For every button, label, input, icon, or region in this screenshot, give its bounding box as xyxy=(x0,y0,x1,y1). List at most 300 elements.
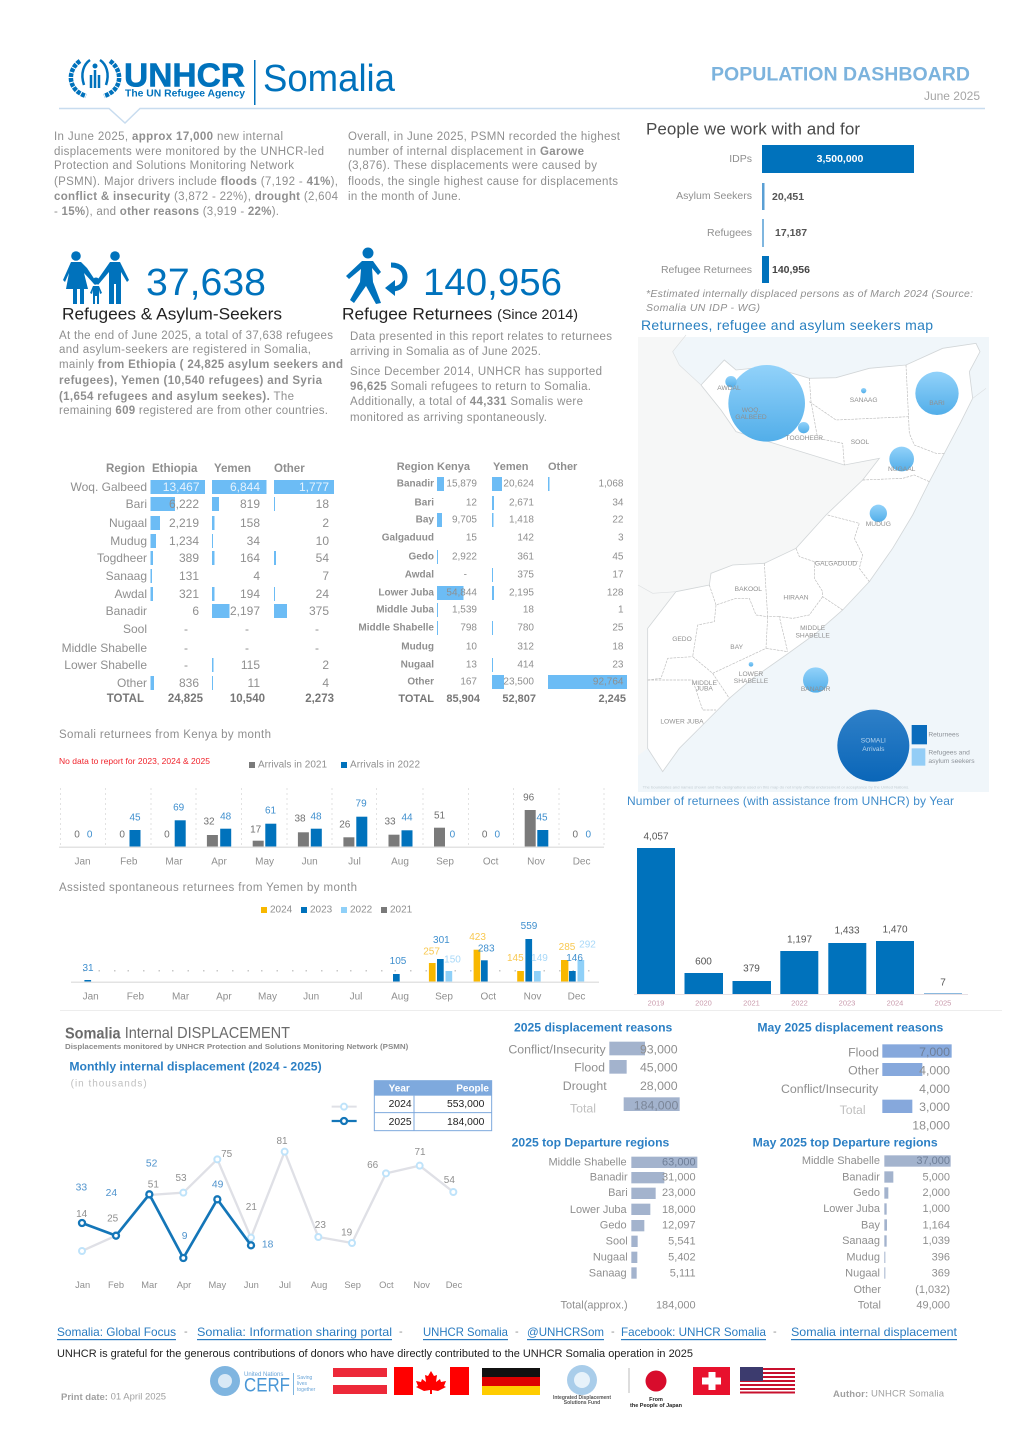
labels 2024: 51 xyxy=(148,1179,159,1190)
table: May 2025 displacement reasons: 4,000 xyxy=(919,1063,950,1077)
table: May 2025 top departure regions: 1,000 xyxy=(922,1203,950,1215)
labels 2024: 54 xyxy=(444,1175,455,1186)
footer links: - xyxy=(515,1326,519,1338)
summary table: 2024 xyxy=(389,1099,412,1110)
table rows: 15 xyxy=(466,532,477,544)
month labels: Oct xyxy=(481,992,496,1002)
table rows: - xyxy=(315,641,319,655)
table: May 2025 top departure regions: Nugaal xyxy=(845,1267,880,1279)
data labels: 33 xyxy=(384,816,396,828)
table rows: 2,219 xyxy=(169,516,199,530)
table rows: Middle Shabelle xyxy=(358,622,434,634)
bubble: Togdheer xyxy=(798,422,809,433)
units note: (in thousands) xyxy=(71,1078,147,1089)
section rule xyxy=(60,1010,1002,1011)
table header: Kenya xyxy=(437,461,471,473)
chart legend: 2024 xyxy=(270,904,293,916)
table: 2025 top departure regions: Sanaag xyxy=(589,1267,627,1279)
summary table: People xyxy=(456,1083,489,1094)
month labels: Mar xyxy=(141,1280,157,1290)
table rows: 375 xyxy=(309,604,329,618)
subheading: Refugee Returnees (Since 2014) xyxy=(342,304,578,324)
table rows: 131 xyxy=(179,569,199,583)
table rows: 9,705 xyxy=(452,514,477,526)
footer links xyxy=(57,1325,958,1339)
table rows: 1,418 xyxy=(509,514,534,526)
table rows: Banadir xyxy=(397,478,434,490)
data labels xyxy=(74,792,592,840)
table rows: 167 xyxy=(460,676,477,688)
table rows: 11 xyxy=(248,676,260,690)
line: 2024 xyxy=(79,1149,456,1254)
bar: refugee returnees: 140,956 xyxy=(772,264,810,276)
table: May 2025 top departure regions: (1,032) xyxy=(915,1284,950,1296)
region labels: SHABELLE xyxy=(795,632,830,639)
dashboard title: POPULATION DASHBOARD xyxy=(711,64,970,86)
data labels: 0 xyxy=(482,830,488,840)
footer links: Somalia: Information sharing portal xyxy=(197,1325,392,1339)
data labels: 301 xyxy=(433,935,450,946)
table: May 2025 displacement reasons: Other xyxy=(848,1063,879,1077)
table rows: 13,467 xyxy=(163,480,200,494)
data labels: 283 xyxy=(478,944,495,954)
table: 2025 top departure regions: Nugaal xyxy=(593,1252,628,1264)
table rows: 24 xyxy=(316,587,329,601)
table rows: 10 xyxy=(466,642,477,652)
body text: remaining 609 registered are from other countries. xyxy=(59,405,328,417)
section subtitle: Displacements monitored by UNHCR Protection and Solutions Monitoring Network (PSMN) xyxy=(65,1042,409,1051)
table: 2025 top departure regions: Lower Juba xyxy=(570,1204,628,1216)
donor logos xyxy=(210,1365,795,1409)
bubble: Awdal xyxy=(725,376,737,387)
logo divider xyxy=(254,60,256,105)
table rows: 1,234 xyxy=(169,534,199,548)
table rows: 15,879 xyxy=(446,478,477,490)
intro text right: in the month of June. xyxy=(348,191,461,203)
region labels: SOOL xyxy=(851,439,870,446)
data labels: 26 xyxy=(339,820,351,830)
chart legend xyxy=(249,760,420,770)
region borders xyxy=(648,365,944,710)
table rows: 23 xyxy=(612,660,624,670)
data labels: 600 xyxy=(695,956,712,968)
month labels: Mar xyxy=(172,992,190,1002)
region labels: TOGDHEER xyxy=(786,435,823,442)
month labels: Jun xyxy=(302,856,318,868)
labels 2024: 14 xyxy=(76,1209,88,1220)
big number: 140,956 xyxy=(423,262,562,304)
table header xyxy=(397,461,578,473)
author: Author: UNHCR Somalia xyxy=(833,1388,945,1400)
footer links: Somalia internal displacement xyxy=(791,1325,958,1339)
icon: walker with return arrow xyxy=(346,248,405,304)
labels 2024: 81 xyxy=(276,1136,288,1147)
month labels: Oct xyxy=(483,856,499,868)
table rows: 18 xyxy=(316,497,329,511)
data labels: 0 xyxy=(586,830,592,840)
region labels: AWDAL xyxy=(717,385,741,392)
table rows: 1 xyxy=(618,604,624,616)
month labels: Oct xyxy=(379,1280,394,1290)
chart legend: 2022 xyxy=(350,904,373,916)
table rows: Nugaal xyxy=(401,660,434,670)
table bars xyxy=(437,477,627,689)
month labels: May xyxy=(209,1280,226,1290)
footer links: UNHCR Somalia xyxy=(423,1325,508,1339)
intro text right: floods, the single highest cause for displacements xyxy=(348,176,618,188)
body text: Data presented in this report relates to returnees xyxy=(350,331,612,343)
data labels: 45 xyxy=(536,812,548,824)
body text: refugees), Yemen (10,540 refugees) and Syria xyxy=(59,375,323,387)
month labels: Aug xyxy=(391,856,409,868)
month labels: Aug xyxy=(391,992,409,1002)
region labels: Arrivals xyxy=(862,746,885,753)
table rows: - xyxy=(184,622,188,636)
table header: Yemen xyxy=(493,461,529,473)
table rows: - xyxy=(464,570,467,580)
data labels: 44 xyxy=(401,812,413,824)
table rows: Nugaal xyxy=(109,516,147,530)
bubble: Sanaag xyxy=(861,388,866,393)
table: May 2025 displacement reasons xyxy=(757,1020,952,1132)
table rows: 414 xyxy=(517,660,534,670)
labels 2024: 25 xyxy=(107,1213,119,1224)
logo: CERF: lives xyxy=(297,1381,308,1387)
table: May 2025 top departure regions: 37,000 xyxy=(916,1155,950,1167)
labels 2024: 66 xyxy=(367,1160,379,1171)
chart: returnees from Yemen by month xyxy=(59,882,599,1002)
table rows: 1,777 xyxy=(299,480,329,494)
labels 2025: 9 xyxy=(182,1231,188,1242)
labels 2025 xyxy=(76,1158,274,1250)
data labels: 423 xyxy=(469,932,486,943)
body text xyxy=(350,331,612,424)
intro text left: (PSMN). Major drivers include floods (7,192 - 41%), xyxy=(54,176,338,188)
legend: asylum seekers xyxy=(928,758,975,765)
data labels: 0 xyxy=(573,830,579,840)
table: May 2025 top departure regions: Other xyxy=(854,1284,881,1296)
table: May 2025 displacement reasons: Total xyxy=(840,1103,866,1117)
labels 2024 xyxy=(76,1136,455,1238)
table rows: 4 xyxy=(253,569,260,583)
month labels: Nov xyxy=(527,856,545,868)
table: May 2025 top departure regions: Banadir xyxy=(842,1171,880,1183)
bar: IDPs: IDPs xyxy=(729,153,752,165)
bubble: Woqooyi Galbeed xyxy=(728,365,805,442)
header rule with notch xyxy=(59,108,985,123)
month labels xyxy=(75,1280,463,1290)
table: 2025 top departure regions: 63,000 xyxy=(662,1156,696,1168)
month labels: Feb xyxy=(120,856,138,868)
footer links: - xyxy=(399,1326,403,1338)
table rows: 34 xyxy=(247,534,260,548)
bar: refugees: Refugees xyxy=(707,227,752,239)
bar: refugee returnees xyxy=(661,256,810,283)
bar: asylum seekers: Asylum Seekers xyxy=(676,190,752,202)
table rows: 7 xyxy=(322,569,329,583)
chart title: Number of returnees (with assistance from UNHCR) by Year xyxy=(627,794,954,808)
line legend xyxy=(332,1104,357,1124)
table: 2025 top departure regions: 23,000 xyxy=(662,1187,696,1199)
table totals xyxy=(398,693,626,705)
table: returnees by region xyxy=(358,461,627,705)
table totals: 10,540 xyxy=(230,693,265,705)
table rows xyxy=(358,478,624,688)
region labels: WOQ. xyxy=(742,407,760,414)
data labels: 69 xyxy=(173,802,185,814)
table: May 2025 top departure regions: 49,000 xyxy=(916,1300,950,1312)
body text: (1,654 refugees and asylum seekes). The xyxy=(59,391,294,403)
table rows: 2,922 xyxy=(452,552,477,562)
labels 2025: 33 xyxy=(76,1182,87,1193)
donor acknowledgement: UNHCR is grateful for the generous contributions of donors who have directly contributed to the UNHCR Somalia operation in 2025 xyxy=(57,1348,693,1360)
table rows: Lower Juba xyxy=(378,588,434,598)
table: 2025 displacement reasons: Conflict/Insecurity xyxy=(508,1042,606,1056)
region labels: LOWER JUBA xyxy=(660,718,704,725)
data labels: 31 xyxy=(82,963,94,974)
footnote: Somalia UN IDP - WG) xyxy=(646,302,760,314)
table rows: 34 xyxy=(612,498,624,508)
table: 2025 top departure regions: Sool xyxy=(606,1236,628,1248)
year labels: 2020 xyxy=(695,998,712,1008)
table totals xyxy=(107,693,334,705)
labels 2024: 53 xyxy=(175,1173,187,1184)
table rows: 18 xyxy=(523,604,534,616)
logo: CERF: Saving xyxy=(297,1375,313,1381)
region labels: GALGADUUD xyxy=(815,560,857,567)
region labels: MIDDLE xyxy=(692,680,717,687)
table rows: 10 xyxy=(316,534,329,548)
logo: CERF xyxy=(210,1366,316,1396)
bar: asylum seekers: 20,451 xyxy=(772,191,804,203)
bubble: Bari xyxy=(915,372,959,415)
data labels: 48 xyxy=(220,812,232,822)
year labels: 2021 xyxy=(743,998,760,1008)
footer links: - xyxy=(773,1326,777,1338)
table header: Ethiopia xyxy=(152,463,198,475)
table rows: 128 xyxy=(607,588,624,598)
table: 2025 top departure regions: 18,000 xyxy=(662,1204,696,1216)
table: 2025 top departure regions: 12,097 xyxy=(662,1220,696,1232)
data labels: 17 xyxy=(250,824,262,836)
flag: Canada xyxy=(394,1367,469,1395)
table totals: 24,825 xyxy=(168,693,204,705)
month labels: Feb xyxy=(127,992,144,1002)
footnote xyxy=(646,288,973,314)
summary table: 2025 xyxy=(389,1117,412,1128)
month labels: Nov xyxy=(413,1280,430,1290)
logo tagline: The UN Refugee Agency xyxy=(125,88,245,100)
flag: USA xyxy=(740,1367,795,1393)
chart legend xyxy=(261,904,413,916)
labels 2025: 24 xyxy=(106,1188,117,1199)
chart: returnees from Kenya by month xyxy=(59,729,604,868)
table: 2025 top departure regions xyxy=(512,1136,697,1312)
panel: displacement tables xyxy=(508,1020,952,1312)
table: 2025 top departure regions: Banadir xyxy=(590,1172,628,1184)
line: 2025 xyxy=(79,1191,254,1261)
table: May 2025 displacement reasons: 7,000 xyxy=(919,1045,950,1059)
month labels: Jun xyxy=(303,992,319,1002)
table: 2025 top departure regions: Total(approx.) xyxy=(561,1300,628,1312)
table rows: Woq. Galbeed xyxy=(70,480,147,494)
region labels: MIDDLE xyxy=(800,625,826,632)
table rows: 25 xyxy=(612,622,624,634)
legend xyxy=(912,725,975,766)
region labels: MUDUG xyxy=(866,521,891,528)
data labels: 51 xyxy=(434,810,445,822)
table: May 2025 top departure regions xyxy=(753,1136,951,1312)
table rows: Sool xyxy=(123,622,147,636)
table rows: 17 xyxy=(612,570,624,580)
table rows: 13 xyxy=(466,660,477,670)
data labels: 257 xyxy=(423,946,440,958)
table: 2025 top departure regions: Middle Shabelle xyxy=(548,1156,627,1168)
data labels: 146 xyxy=(566,953,583,964)
month labels: Jan xyxy=(74,856,91,868)
axis xyxy=(59,846,604,848)
labels 2025: 18 xyxy=(262,1239,274,1250)
map source note: The boundaries and names shown and the designations used on this map do not imply official endorsement or acceptance by the United Nations. xyxy=(643,784,909,789)
region labels: HIRAAN xyxy=(783,594,809,601)
table rows: 1,068 xyxy=(598,478,624,490)
table rows: 142 xyxy=(517,532,534,544)
region labels: BARI xyxy=(929,400,945,407)
bars xyxy=(84,939,584,982)
table: 2025 top departure regions: 31,000 xyxy=(662,1172,696,1184)
table totals: 2,245 xyxy=(598,693,626,705)
table rows: 375 xyxy=(517,570,534,580)
table totals: TOTAL xyxy=(107,693,144,705)
table rows: Sanaag xyxy=(106,569,147,583)
section title: Somalia Internal DISPLACEMENT xyxy=(65,1025,290,1042)
table: 2025 displacement reasons: Drought xyxy=(563,1079,607,1093)
body text xyxy=(59,330,343,417)
table rows: Bay xyxy=(416,514,434,526)
footer links: - xyxy=(611,1326,615,1338)
bubble: Banadir xyxy=(803,667,828,693)
icon: UNHCR emblem xyxy=(71,60,119,96)
table rows: 158 xyxy=(240,516,260,530)
logo: CERF: United Nations xyxy=(244,1372,283,1378)
region labels: SANAAG xyxy=(850,397,878,404)
footer links: @UNHCRSom xyxy=(527,1325,604,1339)
data labels: 45 xyxy=(129,812,141,824)
month labels xyxy=(83,992,585,1002)
table rows: - xyxy=(315,622,319,636)
month labels: Jul xyxy=(350,992,362,1002)
month labels: Sep xyxy=(436,856,454,868)
table rows: 389 xyxy=(179,551,199,565)
chart legend: 2021 xyxy=(390,904,413,916)
intro text right: Overall, in June 2025, PSMN recorded the highest xyxy=(348,131,621,143)
date: June 2025 xyxy=(924,89,980,103)
region labels xyxy=(660,385,945,753)
table: 2025 top departure regions: Gedo xyxy=(600,1220,627,1232)
panel: map xyxy=(638,335,989,792)
table rows: 54 xyxy=(316,551,329,565)
year labels: 2022 xyxy=(791,998,808,1008)
region labels: NUGAAL xyxy=(888,466,916,473)
table: May 2025 top departure regions: Bay xyxy=(861,1220,880,1232)
table: 2025 displacement reasons: Flood xyxy=(574,1061,605,1075)
year labels: 2023 xyxy=(839,998,855,1008)
data labels: 1,433 xyxy=(834,926,860,936)
intro text left: In June 2025, approx 17,000 new internal xyxy=(54,131,283,143)
table rows: Galgaduud xyxy=(382,532,434,544)
table rows: Awdal xyxy=(115,587,147,601)
region labels: BANADIR xyxy=(801,686,831,693)
logo wordmark: UNHCR xyxy=(124,56,245,94)
table header xyxy=(106,463,305,475)
region labels: BAKOOL xyxy=(735,586,762,593)
chart title: Somali returnees from Kenya by month xyxy=(59,729,271,741)
table rows: Other xyxy=(117,676,147,690)
dotted gridline xyxy=(83,970,590,972)
month labels: Apr xyxy=(216,992,232,1002)
month labels: Dec xyxy=(568,992,585,1002)
table rows: 798 xyxy=(460,622,477,634)
logo: CBPF xyxy=(553,1365,611,1406)
region labels: BAY xyxy=(730,644,744,651)
data labels: 61 xyxy=(265,806,276,816)
table: May 2025 top departure regions: Gedo xyxy=(853,1187,880,1199)
body text: and asylum-seekers are registered in Somalia, xyxy=(59,344,311,356)
data labels: 105 xyxy=(390,956,407,967)
intro text left: - 15%), and other reasons (3,919 - 22%). xyxy=(54,206,279,218)
body text: 96,625 Somali refugees to return to Somalia. xyxy=(350,381,591,393)
no data note: No data to report for 2023, 2024 & 2025 xyxy=(59,756,210,766)
table rows: Middle Juba xyxy=(376,604,434,616)
intro text left xyxy=(54,131,339,218)
logo divider xyxy=(628,1368,630,1393)
bars xyxy=(637,848,962,994)
table header: Region xyxy=(397,461,434,473)
table: 2025 displacement reasons: Total xyxy=(570,1101,596,1115)
subheading: Refugees & Asylum-Seekers xyxy=(62,304,282,324)
bubble: Lower Shabelle xyxy=(749,662,753,667)
table totals: 85,904 xyxy=(446,693,481,705)
body text: Since December 2014, UNHCR has supported xyxy=(350,366,602,378)
heading: People we work with and for xyxy=(646,120,860,138)
labels 2024: 21 xyxy=(246,1202,257,1213)
panel: refugee returnees xyxy=(342,248,612,424)
data labels: 0 xyxy=(450,830,456,840)
table rows: 2,195 xyxy=(509,588,534,598)
data labels xyxy=(643,832,946,988)
table rows: 54,844 xyxy=(446,588,477,598)
summary table xyxy=(374,1081,492,1131)
table rows: 23,500 xyxy=(503,676,534,688)
chart title: Monthly internal displacement (2024 - 2025) xyxy=(69,1060,322,1074)
body text: arriving in Somalia as of June 2025. xyxy=(350,346,541,358)
region labels: JUBA xyxy=(696,685,713,692)
flag: Japan: From xyxy=(649,1397,663,1403)
labels 2025: 52 xyxy=(146,1158,158,1169)
data labels: 0 xyxy=(495,830,501,840)
data labels: 0 xyxy=(87,830,93,840)
data labels: 1,470 xyxy=(882,924,908,936)
table rows: Other xyxy=(407,676,434,688)
table header: Other xyxy=(274,463,305,475)
region labels: SHABELLE xyxy=(734,678,769,685)
data labels: 0 xyxy=(74,830,80,840)
table rows: 18 xyxy=(612,642,624,652)
labels 2024: 23 xyxy=(315,1220,326,1231)
table rows: 6,222 xyxy=(169,497,199,511)
table rows: Mudug xyxy=(110,534,147,548)
bar: IDPs: 3,500,000 xyxy=(817,153,864,165)
